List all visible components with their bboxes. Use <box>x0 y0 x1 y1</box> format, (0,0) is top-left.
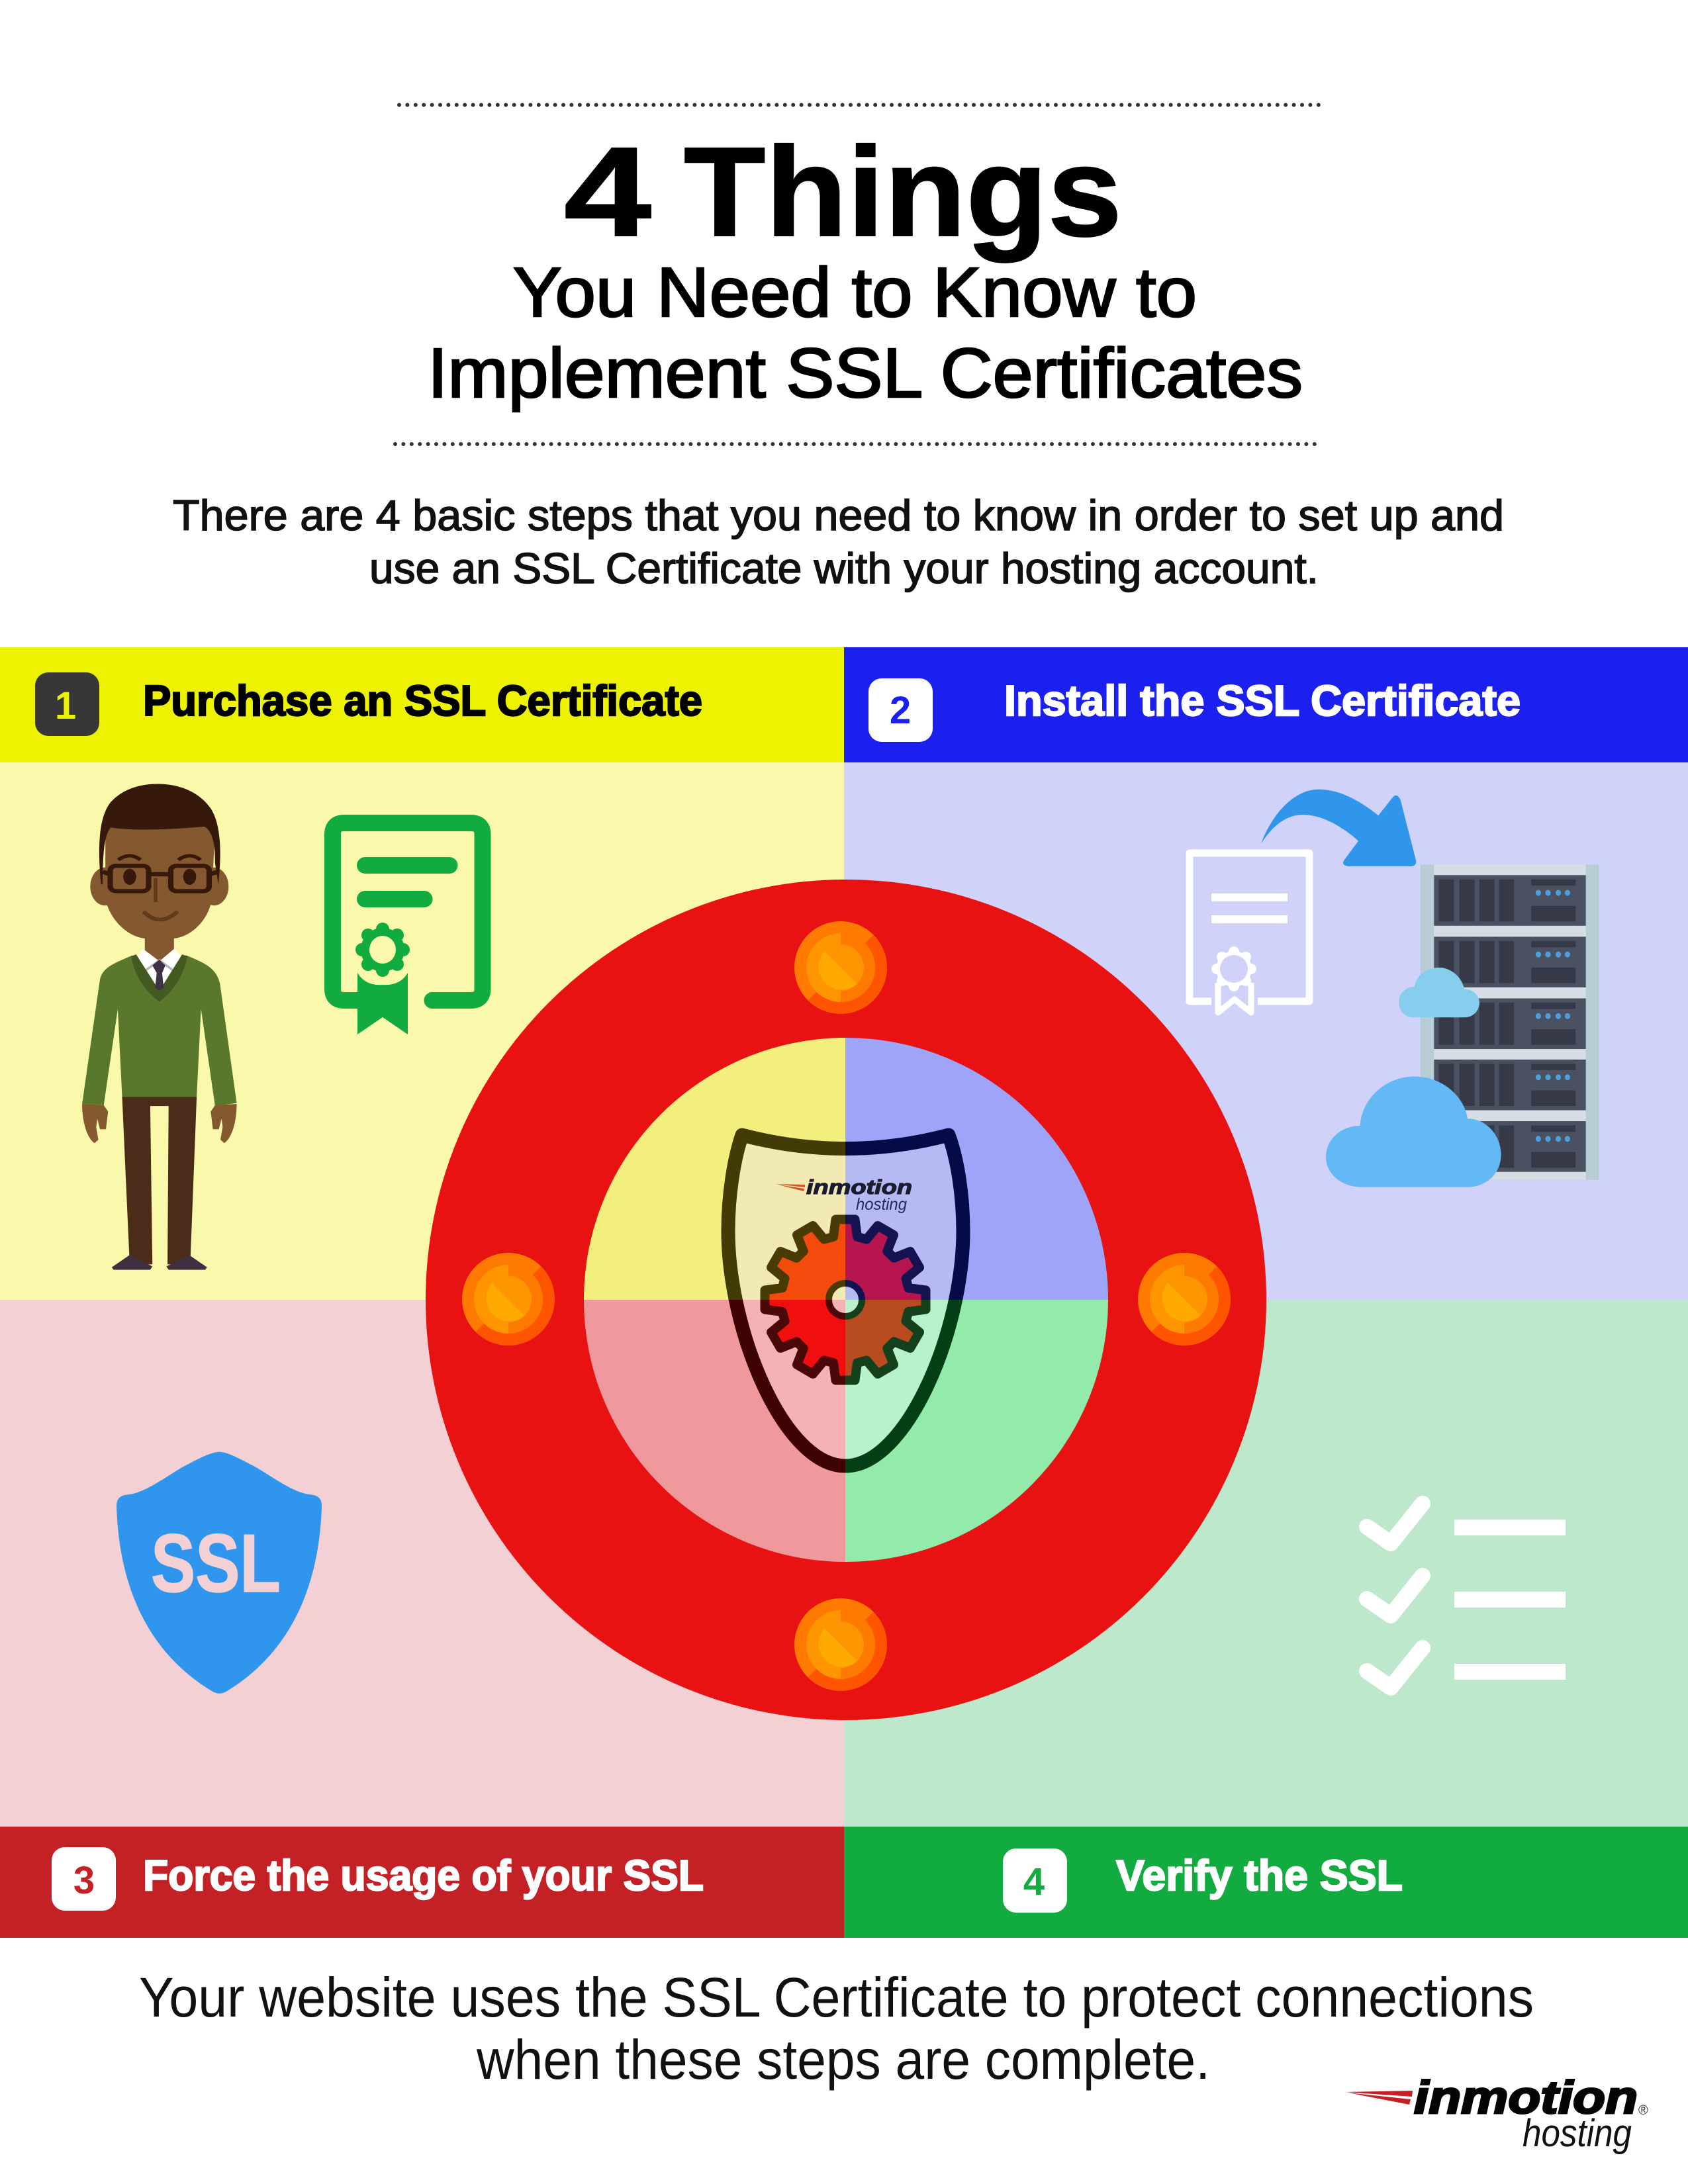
panel: step 4 verify <box>844 1300 1688 1938</box>
orange node: bottom <box>794 1598 887 1691</box>
shield logo: hosting <box>856 1195 907 1214</box>
step 2 heading band <box>844 647 1688 762</box>
subtitle line 1: You Need to Know to <box>513 253 1197 332</box>
closing text: when these steps are complete. <box>476 2028 1210 2091</box>
closing text: Your website uses the SSL Certificate to protect connections <box>139 1966 1534 2028</box>
step 1 heading band <box>0 647 844 762</box>
step 3 heading band <box>0 1827 844 1938</box>
panel: step 1 purchase <box>0 647 844 1300</box>
illustration: man with glasses <box>82 784 237 1270</box>
step 3 heading: Force the usage of your SSL <box>143 1851 704 1899</box>
shield logo <box>775 1175 912 1214</box>
intro text: There are 4 basic steps that you need to know in order to set up and <box>173 491 1504 539</box>
step 2 heading: Install the SSL Certificate <box>1004 676 1521 725</box>
orange node: top <box>794 921 887 1014</box>
step 3 number badge: 3 <box>73 1859 95 1902</box>
orange node: left <box>462 1253 555 1345</box>
step 1 number badge <box>35 672 99 736</box>
footer logo: inmotion hosting <box>1345 2071 1648 2155</box>
central red ring <box>426 880 1266 1720</box>
title: 4 <box>564 120 651 263</box>
title: Things <box>684 120 1122 263</box>
step 2 number badge <box>868 678 933 742</box>
shield logo: inmotion <box>806 1175 912 1199</box>
closing text <box>139 1966 1534 2091</box>
icon: SSL shield: SSL <box>151 1518 281 1610</box>
subtitle line 2: Implement SSL Certificates <box>428 334 1303 412</box>
icon: checklist <box>1367 1504 1566 1688</box>
inner circle quadrants <box>584 1038 1108 1562</box>
orange node: right <box>1138 1253 1231 1345</box>
footer logo: inmotion hosting: hosting <box>1523 2112 1632 2155</box>
icon: green certificate <box>332 823 483 1034</box>
central shield with gear <box>728 1135 963 1466</box>
panel: step 3 force <box>0 1300 844 1938</box>
step 1 heading: Purchase an SSL Certificate <box>143 676 702 725</box>
footer logo: inmotion hosting: ® <box>1638 2103 1648 2118</box>
step 2 number badge: 2 <box>890 689 911 732</box>
step 4 number badge: 4 <box>1023 1860 1045 1903</box>
step 1 number badge: 1 <box>55 684 76 727</box>
intro text: use an SSL Certificate with your hosting account. <box>369 544 1319 592</box>
icon: white certificate <box>1190 853 1309 1013</box>
icon: SSL shield <box>117 1452 322 1694</box>
intro text <box>173 491 1504 592</box>
bottom dotted divider <box>395 442 1315 446</box>
panel: step 2 install <box>844 647 1688 1300</box>
step 4 heading band <box>844 1827 1688 1938</box>
step 4 number badge <box>1003 1848 1067 1913</box>
top dotted divider <box>399 103 1320 107</box>
illustration: server rack with clouds and arrow <box>1261 790 1599 1187</box>
step 4 heading: Verify the SSL <box>1116 1851 1403 1899</box>
step 3 number badge <box>52 1847 116 1911</box>
footer logo: inmotion hosting: inmotion <box>1414 2071 1638 2123</box>
